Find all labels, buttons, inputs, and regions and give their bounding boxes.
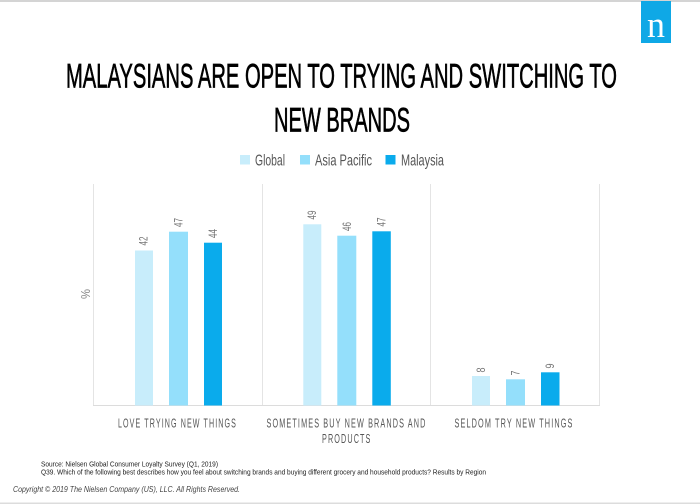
bar chart (93, 184, 600, 406)
category labels: SELDOM TRY NEW THINGS (454, 416, 574, 430)
legend: Malaysia (401, 152, 444, 170)
source note: Source: Nielsen Global Consumer Loyalty Survey (Q1, 2019) (41, 462, 218, 468)
group: sometimes buy new brands and products (303, 210, 391, 406)
source note (41, 462, 486, 476)
title (66, 58, 617, 140)
group: seldom try new things: 8 (476, 368, 488, 372)
legend (240, 152, 444, 170)
icon: Nielsen logo (641, 1, 671, 46)
legend: Asia Pacific (315, 152, 372, 170)
copyright: Copyright © 2019 The Nielsen Company (US), LLC. All Rights Reserved. (13, 484, 240, 494)
icon: Nielsen logo: n (647, 5, 665, 46)
group: sometimes buy new brands and products: 49 (307, 210, 319, 220)
category labels: SOMETIMES BUY NEW BRANDS AND (266, 416, 426, 430)
group: love trying new things: 44 (208, 229, 220, 238)
group: sometimes buy new brands and products: 47 (376, 218, 388, 226)
group: love trying new things: 47 (174, 218, 186, 227)
group: seldom try new things (472, 364, 560, 406)
title: NEW BRANDS (274, 102, 410, 140)
legend: Global (255, 152, 285, 170)
group: love trying new things: 42 (138, 236, 150, 246)
category labels: PRODUCTS (322, 431, 372, 446)
category labels: LOVE TRYING NEW THINGS (118, 416, 237, 430)
category labels (118, 416, 574, 446)
group: love trying new things (135, 218, 222, 406)
group: sometimes buy new brands and products: 46 (342, 222, 354, 231)
group: seldom try new things: 7 (510, 370, 522, 376)
y axis label: % (78, 289, 93, 299)
group: seldom try new things: 9 (545, 364, 557, 368)
source note: Q39. Which of the following best describes how you feel about switching brands and buying different grocery and household products? Results by Region (41, 470, 486, 476)
